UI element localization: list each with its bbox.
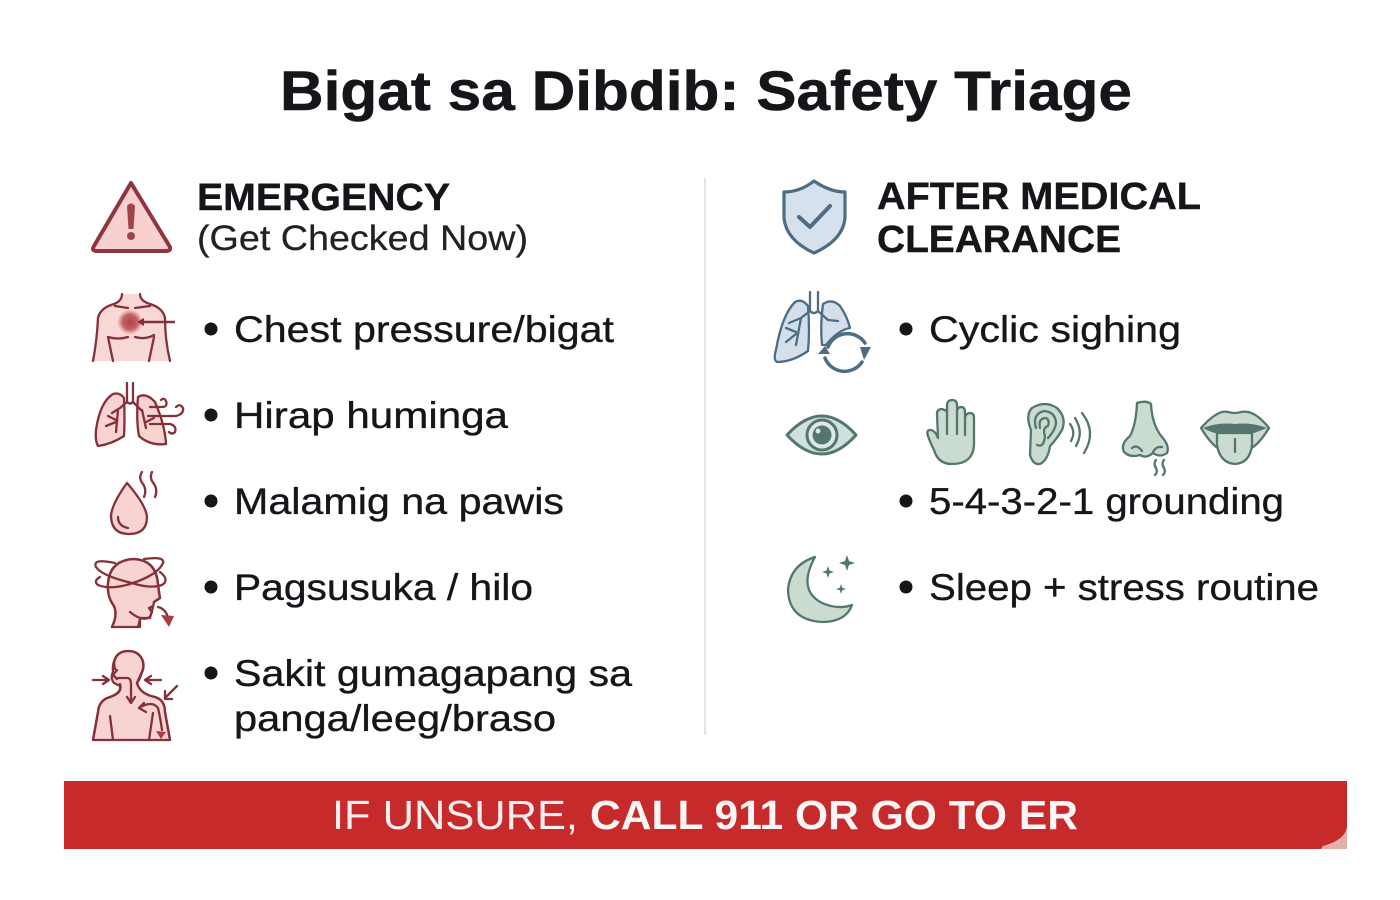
bullet: pagsusuka hilo: Pagsusuka / hilo <box>234 567 533 608</box>
icon: warning triangle <box>93 183 170 251</box>
panel: emergency <box>93 177 632 740</box>
bullet: sakit gumagapang: panga/leeg/braso <box>234 698 556 739</box>
icon: shield check <box>784 181 845 253</box>
panel: after medical clearance <box>775 176 1319 622</box>
bullet: malamig na pawis: Malamig na pawis <box>234 481 564 522</box>
icon: moon and stars <box>788 555 855 622</box>
emergency heading <box>197 177 528 258</box>
title: Bigat sa Dibdib: Safety Triage <box>280 59 1132 122</box>
clearance heading: CLEARANCE <box>877 219 1121 261</box>
clearance heading <box>877 176 1201 261</box>
emergency heading: (Get Checked Now) <box>197 219 528 258</box>
icon: sweat drop <box>111 472 156 534</box>
icon: dizzy head <box>95 558 174 627</box>
icon: lungs with wind <box>96 383 183 446</box>
icon: nose <box>1123 402 1168 475</box>
callout banner <box>64 781 1347 849</box>
icon: eye <box>787 416 856 454</box>
icon: ear with sound <box>1028 404 1090 464</box>
callout banner: IF UNSURE, <box>332 792 578 838</box>
icon: mouth with tongue <box>1201 412 1269 464</box>
callout banner: CALL 911 OR GO TO ER <box>590 792 1078 838</box>
icon: chest pressure <box>93 294 175 361</box>
icon: lungs with cycle arrows <box>775 292 871 371</box>
bullet: chest pressure: Chest pressure/bigat <box>234 309 615 350</box>
bullet: grounding: 5-4-3-2-1 grounding <box>929 481 1284 522</box>
bullet: cyclic sighing: Cyclic sighing <box>929 309 1181 350</box>
bullet: sakit gumagapang <box>204 653 632 739</box>
icon: hand <box>927 400 974 464</box>
bullet: sleep routine: Sleep + stress routine <box>929 567 1319 608</box>
clearance heading: AFTER MEDICAL <box>877 176 1201 218</box>
bullet: sakit gumagapang: Sakit gumagapang sa <box>234 653 632 694</box>
emergency heading: EMERGENCY <box>197 177 450 219</box>
bullet: hirap huminga: Hirap huminga <box>234 395 508 436</box>
icon: radiating pain body <box>93 651 177 740</box>
